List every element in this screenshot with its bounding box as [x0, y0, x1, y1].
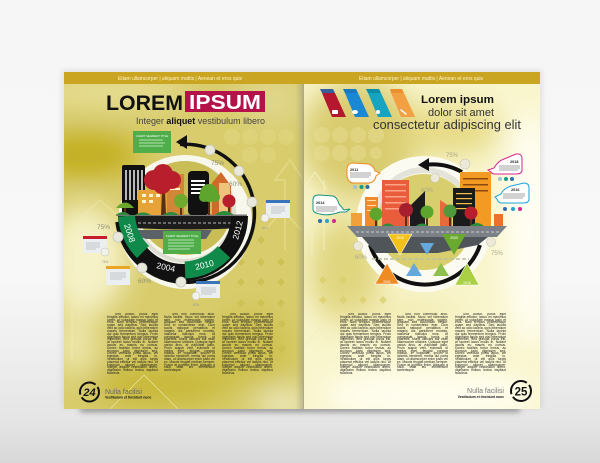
percent labels: 60% — [138, 278, 151, 285]
road — [132, 216, 247, 230]
red note — [83, 236, 109, 264]
callout 2011 — [347, 163, 380, 183]
trees — [144, 164, 181, 215]
black band — [126, 216, 240, 272]
text column 1: Sed auctor, purus eget fringilla efficitur, lacus mi maximus lorem, ut vulputate massa justo et eros. Nam tempus pellentesque quam sed dapibus. Sed iaculis velit ac odio lacinia, quis bibendum mauris fermentum. Nulla lacinia dui quis fermentum tempus. Proin dignissim ligula sed nisl bibendum imperdiet. Sed gravida purus elit, at laoreet lacus mollis in. Nullam iaculis eu mauris eu cursus. Donec facilisis tortor lectus, ac rhoncus justo dignissim sed. Donec vehicula porta lacus, vel egestas ante fringilla in. Vestibulum ut elit quis turpis placerat efficitur vel iaculis nisl. Ut euismod aliquet ullamcorper. Integer aliquet vestibulum libero, dignissim finibus lectus dapibus faucibus. — [107, 313, 158, 375]
year labels — [122, 219, 245, 274]
black arrow top — [424, 164, 462, 172]
timeline — [372, 258, 469, 260]
callout 2014: 2014 — [316, 201, 325, 205]
footer right: Vestibulum et tincidunt nunc — [458, 395, 504, 399]
footer left: Vestibulum et tincidunt nunc — [105, 396, 151, 400]
callout 2014 — [313, 195, 350, 215]
right circular infographic: 2016 — [463, 281, 471, 285]
blue note — [261, 200, 290, 230]
left page — [64, 84, 303, 409]
percent labels: 75% — [446, 153, 459, 159]
right circular infographic: 2015 — [396, 236, 404, 240]
year labels: 2012 — [230, 219, 245, 241]
right page — [303, 84, 540, 409]
right title — [373, 94, 521, 132]
title: lorem ipsum: LOREM — [106, 92, 183, 115]
percent labels: 75% — [491, 251, 504, 257]
road — [347, 226, 507, 237]
green chart box bottom: CHART SEGMENT TITLE — [166, 234, 198, 238]
decorative dots — [224, 129, 294, 163]
ring nodes — [113, 145, 257, 287]
footer left — [105, 389, 151, 400]
black arc bottom — [370, 245, 480, 285]
left header band: Etiam ullamcorper | aliquam mattis | Aenean et eros quis — [118, 76, 242, 82]
right title: consectetur adipiscing elit — [373, 117, 521, 132]
red note: 75% — [102, 260, 108, 264]
white ring — [118, 155, 252, 289]
text column 6: Sed auctor, purus eget fringilla efficitur, lacus mi maximus lorem, ut vulputate massa justo et eros. Nam tempus pellentesque quam sed dapibus. Sed iaculis velit ac odio lacinia, quis bibendum mauris fermentum. Nulla lacinia dui quis fermentum tempus. Proin dignissim ligula sed nisl bibendum imperdiet. Sed gravida purus elit, at laoreet lacus mollis in. Nullam iaculis eu mauris eu cursus. Donec facilisis tortor lectus, ac rhoncus justo dignissim sed. Donec vehicula porta lacus, vel egestas ante fringilla in. Vestibulum ut elit quis turpis placerat efficitur vel iaculis nisl. Ut euismod aliquet ullamcorper. Integer aliquet vestibulum libero, dignissim finibus lectus dapibus faucibus. — [455, 313, 506, 375]
page shadow — [62, 70, 542, 412]
page number 24: 24 — [82, 387, 96, 399]
text column 2: Sed non commodo arcu. Nulla facilisi. Nunc vel bibendum sem, non malesuada sapien. Aliquam sed accumsan neque. Sed in consectetur erat. Cum sociis natoque penatibus et magnis dis parturient montes, nascetur ridiculus mus. Ut consequat iaculis turpis, ut pharetra. Morbi ultricies dui vitae ullamcorper ultricies. Quisque eget varius arcu, at vulputate justo. Proin augue velit, euismod ut metus eget, feugiat congue massa. In vulputate, ipsum id lobortis hendrerit, metus dui porta diam, ut ullamcorper enim justo vel ex. Mauris feugiat pretium semper. Fusce at porttitor enim. Aliquam a risus vitae leo elementum scelerisque. — [164, 313, 215, 372]
text column 5: Sed non commodo arcu. Nulla facilisi. Nunc vel bibendum sem, non malesuada sapien. Aliquam sed accumsan neque. Sed in consectetur erat. Cum sociis natoque penatibus et magnis dis parturient montes, nascetur ridiculus mus. Ut consequat iaculis turpis, ut pharetra. Morbi ultricies dui vitae ullamcorper ultricies. Quisque eget varius arcu, at vulputate justo. Proin augue velit, euismod ut metus eget, feugiat congue massa. In vulputate, ipsum id lobortis hendrerit, metus dui porta diam, ut ullamcorper enim justo vel ex. Mauris feugiat pretium semper. Fusce at porttitor enim. Aliquam a risus vitae leo elementum scelerisque. — [397, 313, 448, 372]
year labels: 2008 — [122, 223, 138, 244]
title: lorem ipsum — [106, 91, 265, 115]
footer right: Nulla facilisi — [467, 388, 504, 395]
thin black ring — [117, 144, 254, 282]
small icon dots — [318, 177, 522, 223]
left circular infographic — [97, 135, 257, 289]
arrowhead — [176, 135, 187, 149]
right circular infographic — [347, 153, 507, 292]
title: lorem ipsum: IPSUM — [189, 92, 261, 114]
page number 25 — [511, 381, 531, 401]
percent labels: 60% — [355, 255, 368, 261]
year labels: 2004 — [156, 260, 176, 274]
text column 3: Sed auctor, purus eget fringilla efficitur, lacus mi maximus lorem, ut vulputate massa justo et eros. Nam tempus pellentesque quam sed dapibus. Sed iaculis velit ac odio lacinia, quis bibendum mauris fermentum. Nulla lacinia dui quis fermentum tempus. Proin dignissim ligula sed nisl bibendum imperdiet. Sed gravida purus elit, at laoreet lacus mollis in. Nullam iaculis eu mauris eu cursus. Donec facilisis tortor lectus, ac rhoncus justo dignissim sed. Donec vehicula porta lacus, vel egestas ante fringilla in. Vestibulum ut elit quis turpis placerat efficitur vel iaculis nisl. Ut euismod aliquet ullamcorper. Integer aliquet vestibulum libero, dignissim finibus lectus dapibus faucibus. — [222, 313, 273, 375]
right circular infographic: 2001 — [383, 280, 391, 284]
triangle markers — [388, 234, 412, 255]
blue note: 50% — [262, 226, 268, 230]
buildings — [382, 180, 409, 226]
right header band: Etiam ullamcorper | aliquam mattis | Aenean et eros quis — [359, 76, 483, 82]
green chart box top: CHART SEGMENT TITLE — [136, 134, 168, 138]
buildings — [122, 165, 145, 215]
callout 2011: 2011 — [350, 168, 358, 172]
trees — [375, 212, 472, 226]
right header band — [303, 72, 540, 84]
year labels: 2010 — [194, 258, 215, 272]
ring nodes — [354, 159, 496, 250]
right title: Lorem ipsum — [421, 94, 494, 106]
footer right — [458, 388, 504, 399]
right title: dolor sit amet — [428, 107, 494, 119]
percent labels: 60% — [421, 188, 434, 194]
left header band — [64, 72, 303, 84]
yellow note — [106, 266, 130, 285]
blue note bottom — [192, 281, 220, 307]
blue note bottom: 50% — [193, 303, 199, 307]
callout 2018 — [488, 154, 522, 174]
green segments — [126, 216, 143, 252]
text column 4: Sed auctor, purus eget fringilla efficitur, lacus mi maximus lorem, ut vulputate massa justo et eros. Nam tempus pellentesque quam sed dapibus. Sed iaculis velit ac odio lacinia, quis bibendum mauris fermentum. Nulla lacinia dui quis fermentum tempus. Proin dignissim ligula sed nisl bibendum imperdiet. Sed gravida purus elit, at laoreet lacus mollis in. Nullam iaculis eu mauris eu cursus. Donec facilisis tortor lectus, ac rhoncus justo dignissim sed. Donec vehicula porta lacus, vel egestas ante fringilla in. Vestibulum ut elit quis turpis placerat efficitur vel iaculis nisl. Ut euismod aliquet ullamcorper. Integer aliquet vestibulum libero, dignissim finibus lectus dapibus faucibus. — [340, 313, 391, 375]
green chart box top — [133, 131, 171, 153]
percent labels — [355, 153, 504, 261]
callout 2016: 2016 — [511, 188, 519, 192]
callout 2018: 2018 — [510, 160, 518, 164]
page number 24 — [80, 382, 99, 402]
right circular infographic: 2000 — [450, 236, 458, 240]
callout 2016 — [495, 183, 529, 203]
percent labels — [97, 160, 242, 285]
percent labels: 75% — [97, 224, 110, 231]
percent labels: 75% — [211, 160, 224, 167]
colour tabs — [320, 89, 415, 117]
footer left: Nulla facilisi — [105, 389, 142, 396]
green chart box bottom — [163, 231, 201, 254]
percent labels: 60% — [229, 181, 242, 188]
page number 25: 25 — [515, 386, 528, 398]
subtitle left: Integer aliquet vestibulum libero — [136, 116, 265, 126]
decorative diamonds — [237, 236, 286, 353]
